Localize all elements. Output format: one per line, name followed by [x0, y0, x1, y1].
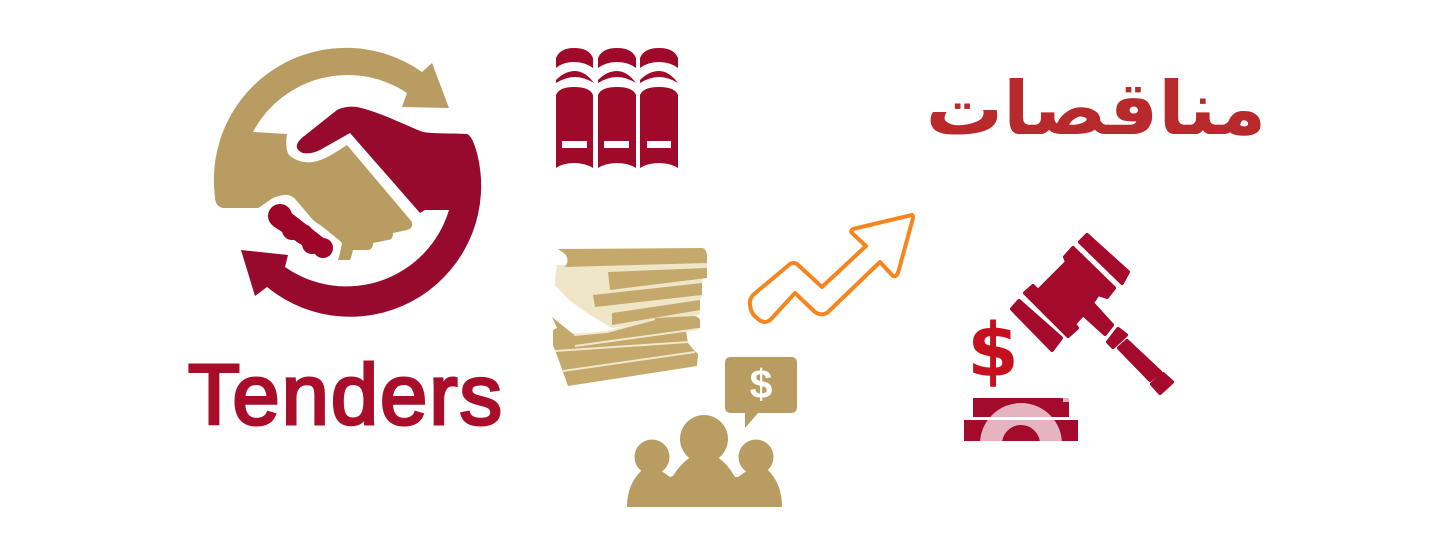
gold arrow and left hand: [214, 48, 449, 260]
gavel head and handle: [1012, 235, 1172, 393]
gavel base with faded ring: [964, 398, 1078, 441]
icon: stack of gold books: [552, 248, 707, 386]
infographic canvas: [188, 48, 1260, 507]
bubble dollar sign: $: [750, 361, 773, 407]
book 2: [598, 87, 636, 168]
icon: gavel with dollar sign: [964, 232, 1174, 441]
cream page silhouette: [555, 263, 707, 328]
icon: orange growth arrow: [750, 215, 913, 322]
red fingers: [268, 204, 333, 258]
dollar sign: $: [967, 308, 1019, 394]
speech bubble: [725, 357, 797, 428]
book 1: [556, 87, 593, 168]
three people: [627, 415, 782, 507]
icon: red open books: [556, 48, 678, 168]
heading: Tenders: Tenders: [188, 348, 502, 443]
red arrow and right hand: [241, 107, 481, 317]
lower stacked books: [552, 316, 700, 386]
icon: audience with dollar speech bubble: [627, 357, 797, 507]
book 3: [640, 87, 678, 168]
heading: Arabic title: مناقصات: [926, 65, 1266, 152]
logo: handshake in circular arrows: [214, 48, 481, 317]
